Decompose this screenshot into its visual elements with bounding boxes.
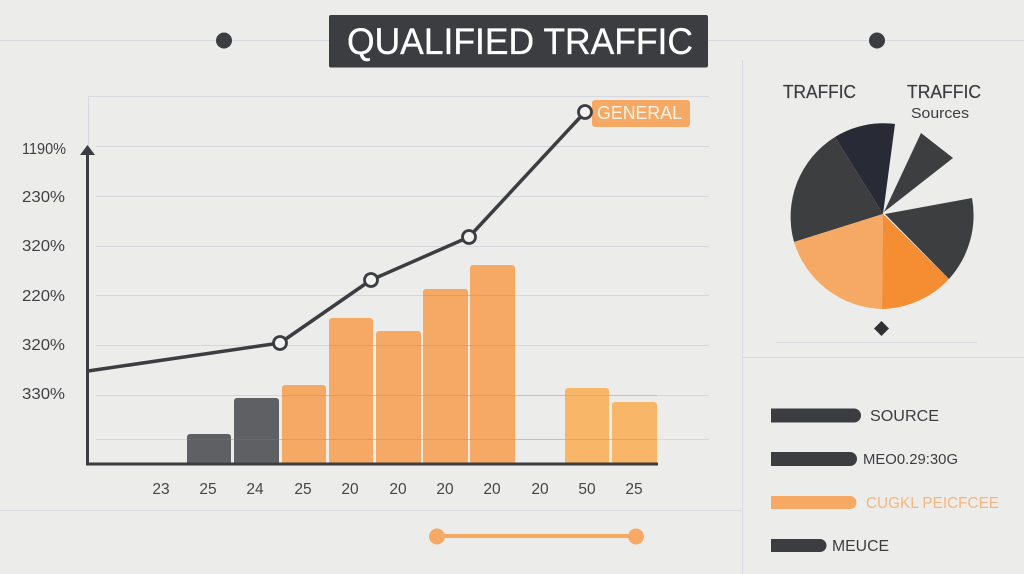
legend xyxy=(771,408,999,555)
heading: pie right: TRAFFIC xyxy=(907,82,981,102)
axes xyxy=(80,145,658,465)
x axis labels: 25 xyxy=(294,481,312,498)
x axis labels: 20 xyxy=(389,481,407,498)
x axis labels: 20 xyxy=(436,481,454,498)
x axis labels: 25 xyxy=(199,481,217,498)
x axis labels: 20 xyxy=(531,481,549,498)
y axis labels: 330% xyxy=(22,386,65,403)
legend item: second xyxy=(771,452,958,468)
trend line xyxy=(88,112,585,371)
callout: general: GENERAL xyxy=(597,103,682,123)
pie chart xyxy=(791,123,974,309)
title: QUALIFIED TRAFFIC xyxy=(347,21,693,62)
legend item: meuce: MEUCE xyxy=(832,538,889,555)
x axis labels: 20 xyxy=(483,481,501,498)
x axis labels: 25 xyxy=(625,481,643,498)
legend item: orange xyxy=(771,495,999,512)
x axis labels: 24 xyxy=(246,481,264,498)
legend item: source: SOURCE xyxy=(870,408,939,425)
y axis labels: 320% xyxy=(22,337,65,354)
legend item: second: MEO0.29:30G xyxy=(863,452,958,468)
x axis labels xyxy=(152,481,643,498)
legend item: meuce xyxy=(771,538,889,555)
icon: left header dot xyxy=(216,32,232,48)
callout: general xyxy=(578,100,690,127)
legend item: source xyxy=(771,408,939,425)
bars xyxy=(187,265,657,464)
legend item: orange: CUGKL PEICFCEE xyxy=(866,495,999,512)
x axis labels: 23 xyxy=(152,481,170,498)
x axis labels: 50 xyxy=(578,481,596,498)
icon: range slider xyxy=(429,528,644,544)
y axis labels: 220% xyxy=(22,288,65,305)
y axis labels: 320% xyxy=(22,238,65,255)
y axis labels: 230% xyxy=(22,189,65,206)
y axis labels: 1190% xyxy=(22,141,66,158)
icon: diamond xyxy=(874,321,889,336)
heading: pie right xyxy=(907,82,981,122)
icon: right header dot xyxy=(869,32,885,48)
y axis labels xyxy=(22,141,66,403)
x axis labels: 20 xyxy=(341,481,359,498)
heading: pie left: TRAFFIC xyxy=(783,82,856,102)
heading: pie right: Sources xyxy=(911,106,969,122)
chart: traffic bars and line xyxy=(22,100,709,498)
